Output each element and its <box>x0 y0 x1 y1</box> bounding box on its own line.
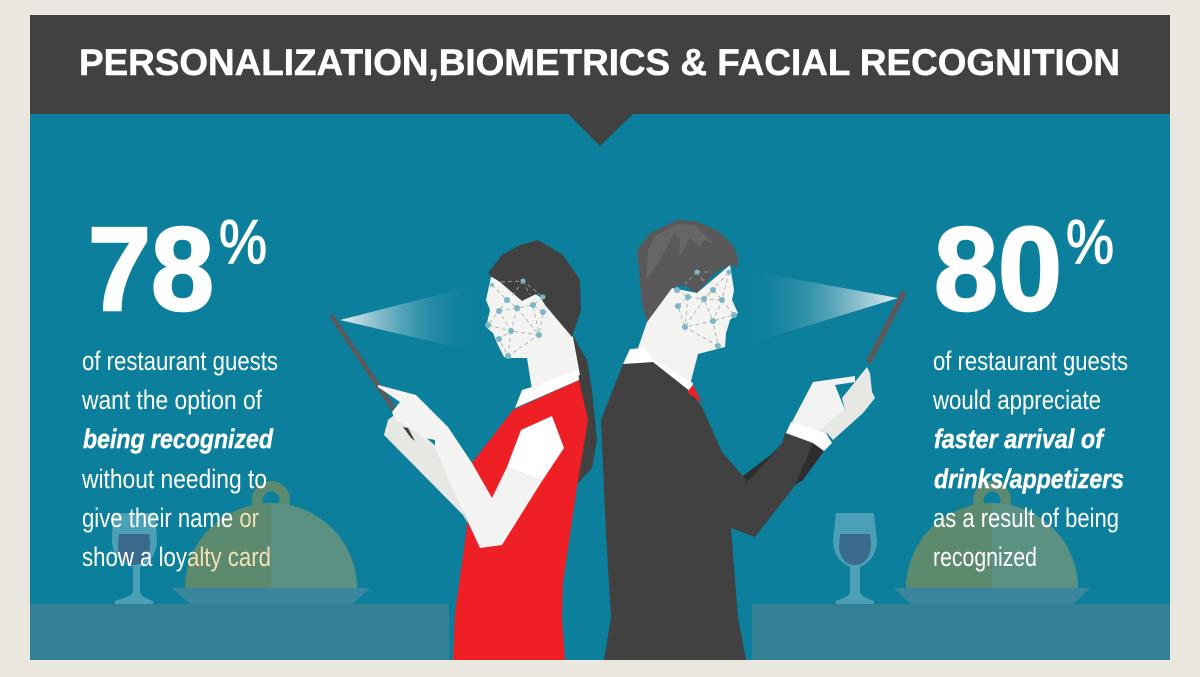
man collar <box>623 348 693 392</box>
man tablet <box>866 290 907 364</box>
left description: being recognized <box>83 424 274 454</box>
right statistic <box>934 203 1114 336</box>
right description: as a result of being <box>933 503 1119 533</box>
woman arm and hand <box>378 385 542 548</box>
beam right <box>745 270 898 345</box>
man hair <box>637 220 738 322</box>
right description <box>932 346 1128 572</box>
right description: drinks/appetizers <box>934 464 1124 494</box>
header band <box>30 15 1170 146</box>
right description: recognized <box>933 542 1037 572</box>
woman face and neck <box>486 277 580 390</box>
woman rear hand <box>384 412 468 524</box>
number 78: 78 <box>88 203 214 336</box>
table right <box>752 604 1170 660</box>
left description: without needing to <box>81 464 267 494</box>
title: PERSONALIZATION,BIOMETRICS & FACIAL RECOGNITION <box>79 42 1120 83</box>
right description: faster arrival of <box>934 424 1106 454</box>
man suit <box>601 362 813 660</box>
main teal panel <box>30 114 1170 660</box>
woman tablet <box>329 314 396 411</box>
man tie <box>687 385 702 403</box>
left description: of restaurant guests <box>82 346 278 376</box>
man front hand <box>792 376 855 433</box>
icon: cloche right <box>893 486 1091 604</box>
beam left <box>340 285 477 352</box>
percent sign: % <box>1066 208 1114 277</box>
face network man <box>674 270 737 349</box>
right description: of restaurant guests <box>933 346 1128 376</box>
woman sleeve <box>507 416 564 481</box>
man rear hand <box>818 367 875 440</box>
woman ponytail <box>565 330 597 483</box>
number 80: 80 <box>934 203 1062 336</box>
left description: show a loyalty card <box>82 542 271 572</box>
woman collar <box>515 370 579 408</box>
woman figure <box>329 240 597 660</box>
table left <box>30 604 449 660</box>
woman dress <box>453 380 588 660</box>
left statistic <box>88 203 267 336</box>
icon: cloche left <box>172 486 371 604</box>
left description <box>81 346 278 572</box>
man sleeve shadow <box>743 443 824 485</box>
left description: want the option of <box>81 385 263 415</box>
left description: give their name or <box>82 503 259 533</box>
icon: wine glass left <box>112 513 157 604</box>
icon: wine glass right <box>833 513 877 604</box>
woman hair <box>488 240 581 337</box>
man cuff <box>786 422 832 451</box>
right description: would appreciate <box>932 385 1101 415</box>
man figure <box>601 220 907 660</box>
man face and neck <box>638 265 738 385</box>
percent sign: % <box>219 208 267 277</box>
face network woman <box>485 278 546 359</box>
